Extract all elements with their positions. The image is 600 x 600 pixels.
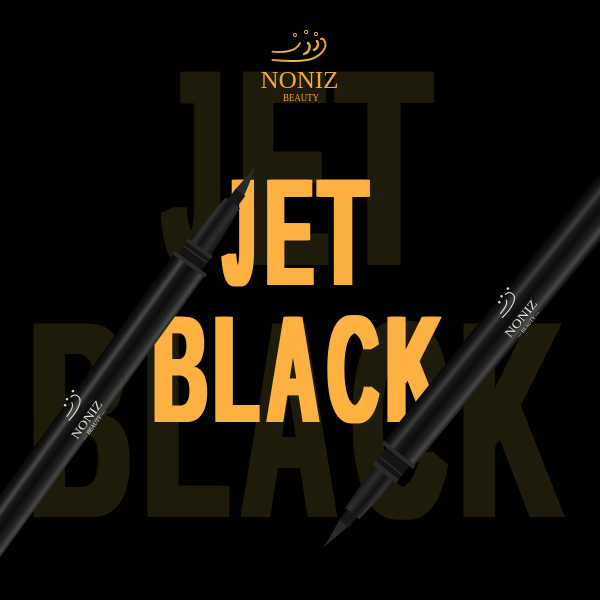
right pen logo [484,283,545,344]
ghost heading: JET [161,11,434,325]
ghost heading: BLACK: A [243,263,335,577]
main heading: BLACK: A [268,284,318,455]
ghost heading: BLACK [30,263,565,577]
ghost heading: JET: T [338,11,430,325]
left pen logo [51,385,110,445]
main heading: BLACK: B [153,284,207,455]
main heading: JET: T [319,146,367,318]
nib holder [228,189,245,206]
ghost heading: BLACK: K [460,263,560,577]
nib [234,164,262,197]
main heading: JET [221,146,370,318]
nib [319,518,349,552]
pen tagline: — BEAUTY — [516,310,542,340]
main body [383,176,600,467]
tapered barrel [190,195,244,255]
main heading: BLACK [153,284,442,455]
collar rings [368,441,415,486]
pen mark [491,288,520,318]
tapered barrel [342,466,395,522]
main heading: JET: E [266,146,313,318]
main heading: BLACK: L [214,284,258,455]
pen wordmark: NONIZ [68,398,105,442]
nib holder [339,510,357,528]
brand logo [260,30,338,104]
tagline: BEAUTY [283,93,319,104]
main body [0,255,204,600]
ghost heading: JET: E [240,11,328,325]
ghost heading: BLACK: B [30,263,131,577]
icon: calligraphy mark [272,30,325,61]
pen wordmark: NONIZ [502,297,540,340]
left eyeliner pen [0,157,275,600]
pen tagline: — BEAUTY — [81,409,108,443]
main heading: BLACK: K [386,284,441,455]
ghost heading: JET: J [164,11,221,325]
ghost heading: BLACK: L [144,263,227,577]
collar rings [172,236,218,278]
main heading: JET: J [224,146,255,318]
main heading: BLACK: C [328,284,378,455]
wordmark: NONIZ [260,67,338,94]
right eyeliner pen [306,176,600,562]
ghost heading: BLACK: C [353,263,446,577]
pen mark [57,390,85,421]
